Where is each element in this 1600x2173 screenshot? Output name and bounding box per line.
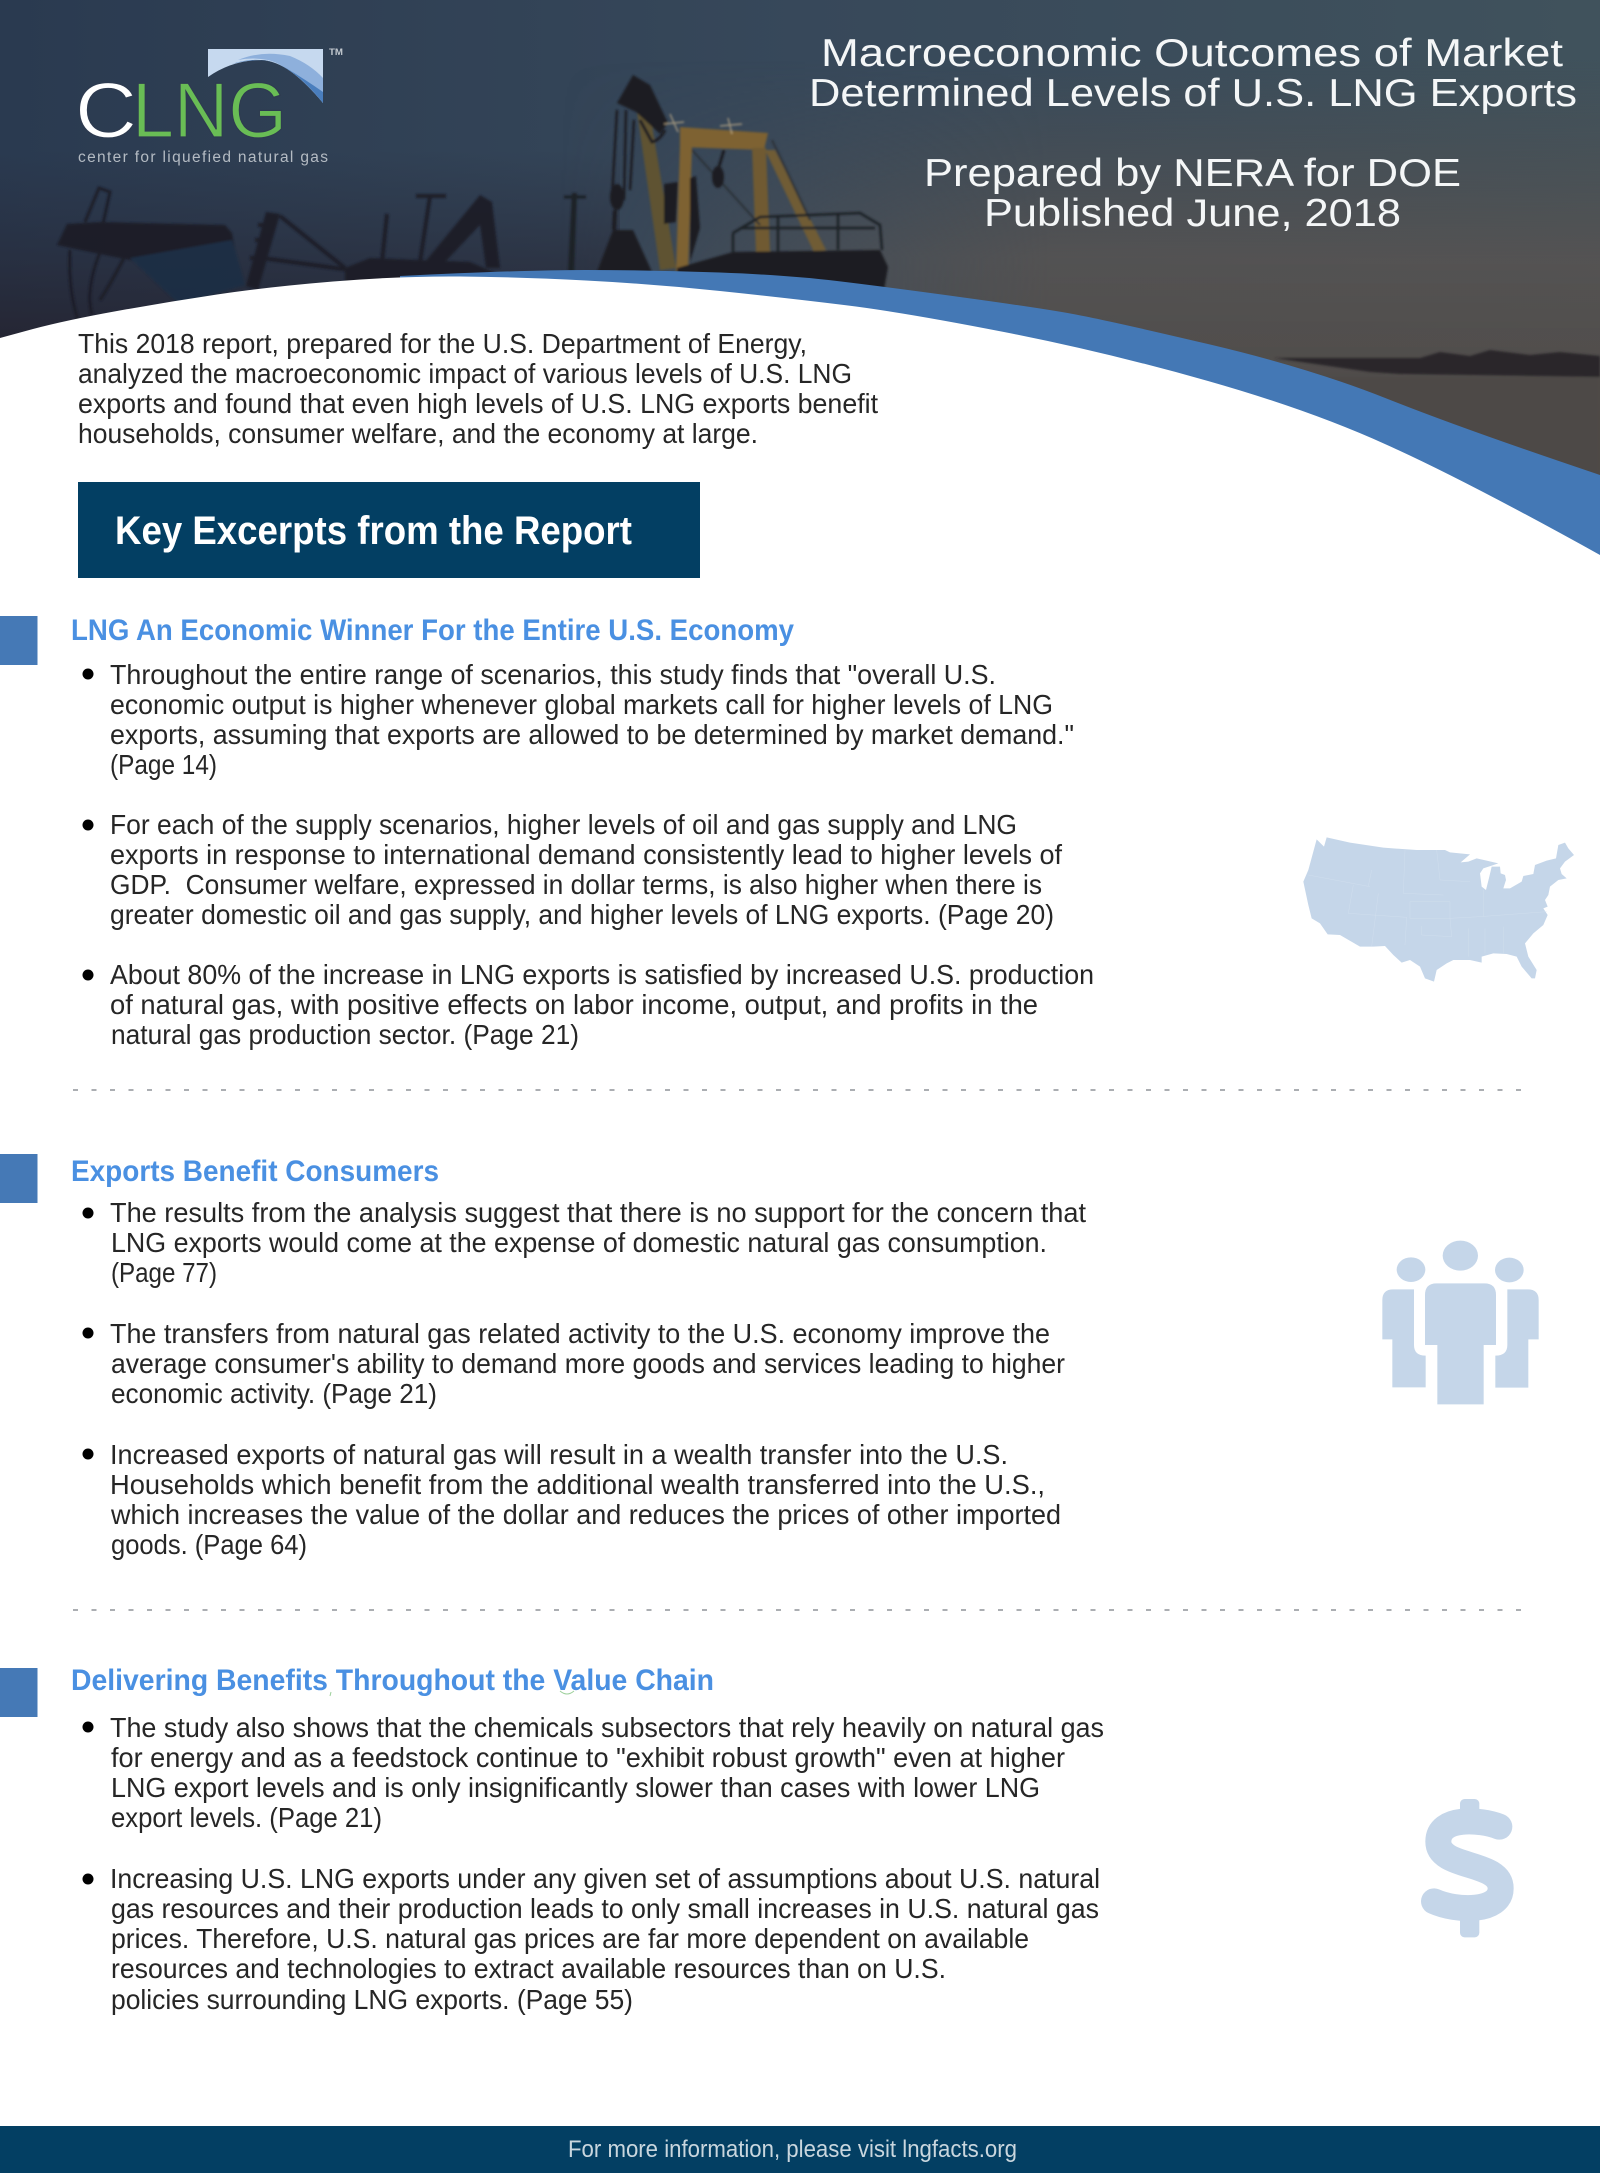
banner: key excerpts: Key Excerpts from the Report [115,509,632,553]
bullet 2: exports in response to international demand consistently lead to higher levels of [110,839,1062,870]
intro paragraph: analyzed the macroeconomic impact of various levels of U.S. LNG [78,358,852,389]
bullet 3: of natural gas, with positive effects on labor income, output, and profits in the [110,989,1038,1020]
bullet 3: natural gas production sector. (Page 21) [111,1019,579,1050]
subtitle: author and date: Published June, 2018 [984,192,1401,235]
footer bar: For more information, please visit lngfacts.org [568,2136,1017,2163]
bullet 1 [82,1712,1104,1833]
logo letters: LNG [132,66,287,154]
distant shoreline [1274,350,1600,497]
bullet 1: Throughout the entire range of scenarios, this study finds that "overall U.S. [110,659,996,690]
bullet 1: exports, assuming that exports are allowed to be determined by market demand." [110,719,1074,750]
bullet 1: (Page 14) [110,749,217,780]
banner: key excerpts [78,482,700,578]
subtitle: author and date: Prepared by NERA for DOE [924,152,1461,195]
bullet 2: GDP. Consumer welfare, expressed in dollar terms, is also higher when there is [110,869,1042,900]
bullet 2 [82,1863,1100,2015]
icon: dollar sign [1434,1799,1501,1937]
bullet 1: LNG exports would come at the expense of domestic natural gas consumption. [111,1227,1047,1258]
intro paragraph: exports and found that even high levels of U.S. LNG exports benefit [78,388,878,419]
bullet 3: Households which benefit from the additional wealth transferred into the U.S., [110,1469,1045,1500]
intro paragraph [78,328,878,449]
section heading: Exports Benefit Consumers [71,1155,439,1188]
bullet 3 [82,959,1094,1050]
bullet 1: The study also shows that the chemicals subsectors that rely heavily on natural gas [110,1712,1104,1743]
section 1: economic winner [0,614,1094,1050]
section marker [0,616,38,665]
footer bar [0,2126,1600,2173]
bullet 3: which increases the value of the dollar and reduces the prices of other imported [110,1499,1061,1530]
bullet 1: export levels. (Page 21) [111,1802,382,1833]
bullet 1: LNG export levels and is only insignificantly slower than cases with lower LNG [111,1772,1040,1803]
section marker [0,1154,38,1203]
section heading: Delivering Benefits Throughout the Value Chain [71,1664,714,1697]
bullet 2: The transfers from natural gas related activity to the U.S. economy improve the [110,1318,1050,1349]
white page curve [0,276,1600,620]
divider 1 [73,1089,1525,1091]
header photo: ships at dusk [0,0,1600,475]
logo flag mark [208,49,323,103]
title: Determined Levels of U.S. LNG Exports [809,72,1577,115]
icon: group of people [1382,1241,1539,1404]
bullet 2: For each of the supply scenarios, higher levels of oil and gas supply and LNG [110,809,1017,840]
left ship silhouette [57,188,500,320]
bullet 1: (Page 77) [111,1257,217,1288]
intro paragraph: households, consumer welfare, and the economy at large. [78,418,758,449]
bullet 2: Increasing U.S. LNG exports under any given set of assumptions about U.S. natural [110,1863,1100,1894]
bullet 2: policies surrounding LNG exports. (Page 55) [111,1984,633,2015]
bullet 3: Increased exports of natural gas will result in a wealth transfer into the U.S. [110,1439,1008,1470]
bullet 1 [82,659,1074,780]
bullet 3: About 80% of the increase in LNG exports is satisfied by increased U.S. production [110,959,1094,990]
bullet 3 [82,1439,1061,1560]
logo: CLNG [75,47,343,166]
subtitle: author and date [924,152,1461,235]
bullet 1: for energy and as a feedstock continue to "exhibit robust growth" even at higher [111,1742,1065,1773]
section heading: LNG An Economic Winner For the Entire U.S. Economy [71,614,794,647]
bullet 2: average consumer's ability to demand more goods and services leading to higher [111,1348,1065,1379]
logo tagline: center for liquefied natural gas [78,149,328,166]
title: Macroeconomic Outcomes of Market [821,32,1563,75]
trademark: TM [329,47,343,57]
bullet 2 [82,1318,1065,1409]
bullet 1 [82,1197,1086,1288]
icon: United States map [1303,837,1574,982]
intro paragraph: This 2018 report, prepared for the U.S. Department of Energy, [78,328,807,359]
logo letters: C [75,66,137,154]
bullet 2: resources and technologies to extract available resources than on U.S. [111,1953,946,1984]
crane and gantry silhouette [564,75,888,290]
bullet 2: prices. Therefore, U.S. natural gas prices are far more dependent on available [111,1923,1029,1954]
section 3: value chain [0,1664,1104,2015]
bullet 1: The results from the analysis suggest that there is no support for the concern that [110,1197,1086,1228]
bullet 3: goods. (Page 64) [111,1529,307,1560]
bullet 1: economic output is higher whenever global markets call for higher levels of LNG [110,689,1053,720]
title [809,32,1577,115]
section marker [0,1668,38,1717]
blue curved band [400,270,1600,560]
bullet 2 [82,809,1062,930]
bullet 2: economic activity. (Page 21) [111,1378,437,1409]
divider 2 [73,1609,1525,1611]
bullet 2: gas resources and their production leads to only small increases in U.S. natural gas [111,1893,1099,1924]
bullet 2: greater domestic oil and gas supply, and higher levels of LNG exports. (Page 20) [110,899,1054,930]
section 2: consumers [0,1154,1086,1560]
